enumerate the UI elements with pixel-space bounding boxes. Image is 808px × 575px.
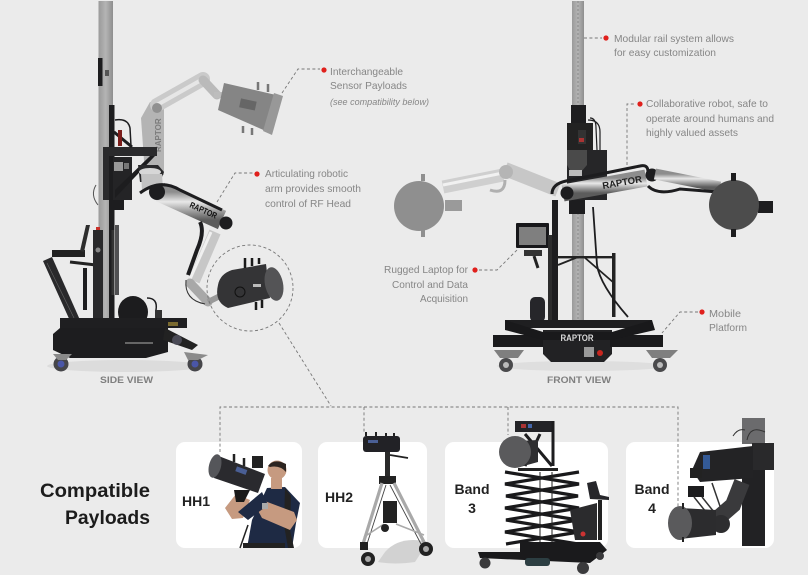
sensor head: [217, 258, 286, 310]
caster wheels: [54, 356, 68, 372]
callout: articulating robotic arm: arm provides smooth: [265, 183, 361, 195]
HH1 handheld antenna: [206, 453, 265, 502]
left ghost arm and disc: [394, 165, 558, 237]
panel: HH2: [318, 432, 433, 566]
modular rail: [572, 1, 584, 321]
front view label: FRONT VIEW: [547, 375, 611, 386]
mobile platform: RAPTOR: [560, 333, 594, 343]
laptop and support frame: [516, 200, 628, 325]
callout: modular rail system: Modular rail system allows: [614, 33, 734, 45]
panel: Band 3: Band: [454, 481, 490, 497]
callout: collaborative robot: operate around humans and: [646, 113, 774, 125]
Band 3 scissor lift system: [478, 421, 609, 574]
motor drum: [118, 296, 148, 328]
callout: rugged laptop: [384, 250, 517, 305]
panel: Band 3: 3: [468, 500, 476, 516]
callout: interchangeable sensor payloads: [282, 66, 429, 107]
laptop: [52, 250, 85, 257]
callout: mobile platform: Platform: [709, 322, 747, 334]
rail: [98, 1, 113, 326]
side view label: SIDE VIEW: [100, 375, 153, 386]
callout: interchangeable sensor payloads: Interchangeable: [330, 66, 403, 78]
ghost arm: [141, 79, 224, 175]
front casters: [499, 358, 513, 372]
heading: compatible payloads: [40, 481, 150, 529]
callout: modular rail system: for easy customization: [614, 47, 716, 59]
ghost arm: RAPTOR: [154, 118, 163, 152]
panel: Band 4: Band: [634, 481, 670, 497]
control column: [93, 230, 103, 328]
robotic arm: [160, 192, 222, 220]
panel: HH1: [176, 442, 302, 548]
front view robot: RAPTOR: [602, 174, 643, 192]
front view robot: [394, 1, 773, 371]
callout: rugged laptop: Acquisition: [420, 293, 468, 305]
callout: articulating robotic arm: Articulating robotic: [265, 168, 348, 180]
callout: interchangeable sensor payloads: Sensor Payloads: [330, 80, 407, 92]
compatibility connector lines: [220, 323, 678, 507]
side view robot: [43, 1, 283, 372]
right arm: [563, 178, 646, 193]
ghost sensor head: [218, 82, 283, 135]
callout: rugged laptop: Rugged Laptop for: [384, 264, 468, 276]
heading: compatible payloads: Payloads: [65, 508, 150, 529]
callout: mobile platform: [662, 308, 747, 334]
dashed circle around sensor head: [207, 245, 293, 331]
callout: collaborative robot: [627, 98, 774, 165]
Band 4 mast mounted system: [668, 418, 774, 546]
mobile base: [60, 318, 187, 328]
side view robot: RAPTOR: [188, 200, 219, 221]
callout: articulating robotic arm: control of RF Head: [265, 198, 351, 210]
laptop stand: [43, 257, 80, 323]
callout: collaborative robot: Collaborative robot, safe to: [646, 98, 768, 110]
HH1 operator: [225, 460, 300, 548]
panel: Band 3: [445, 421, 609, 574]
panel: Band 4: 4: [648, 500, 656, 516]
callout: interchangeable sensor payloads: (see compatibility below): [330, 97, 429, 107]
callout: mobile platform: Mobile: [709, 308, 741, 320]
mobile platform: [493, 320, 678, 372]
callout: collaborative robot: highly valued assets: [646, 127, 738, 139]
callout: rugged laptop: Control and Data: [392, 279, 468, 291]
heading: compatible payloads: Compatible: [40, 481, 150, 502]
callout: modular rail system: [584, 33, 734, 59]
panel: HH1: HH1: [182, 493, 210, 509]
panel: Band 4: [626, 418, 774, 548]
callout: articulating robotic arm: [217, 168, 361, 210]
panel: HH2: HH2: [325, 489, 353, 505]
control block: [571, 105, 586, 123]
HH2 tripod antenna: [360, 432, 433, 566]
shoulder joint: [138, 165, 164, 182]
post and frame: [109, 105, 114, 327]
